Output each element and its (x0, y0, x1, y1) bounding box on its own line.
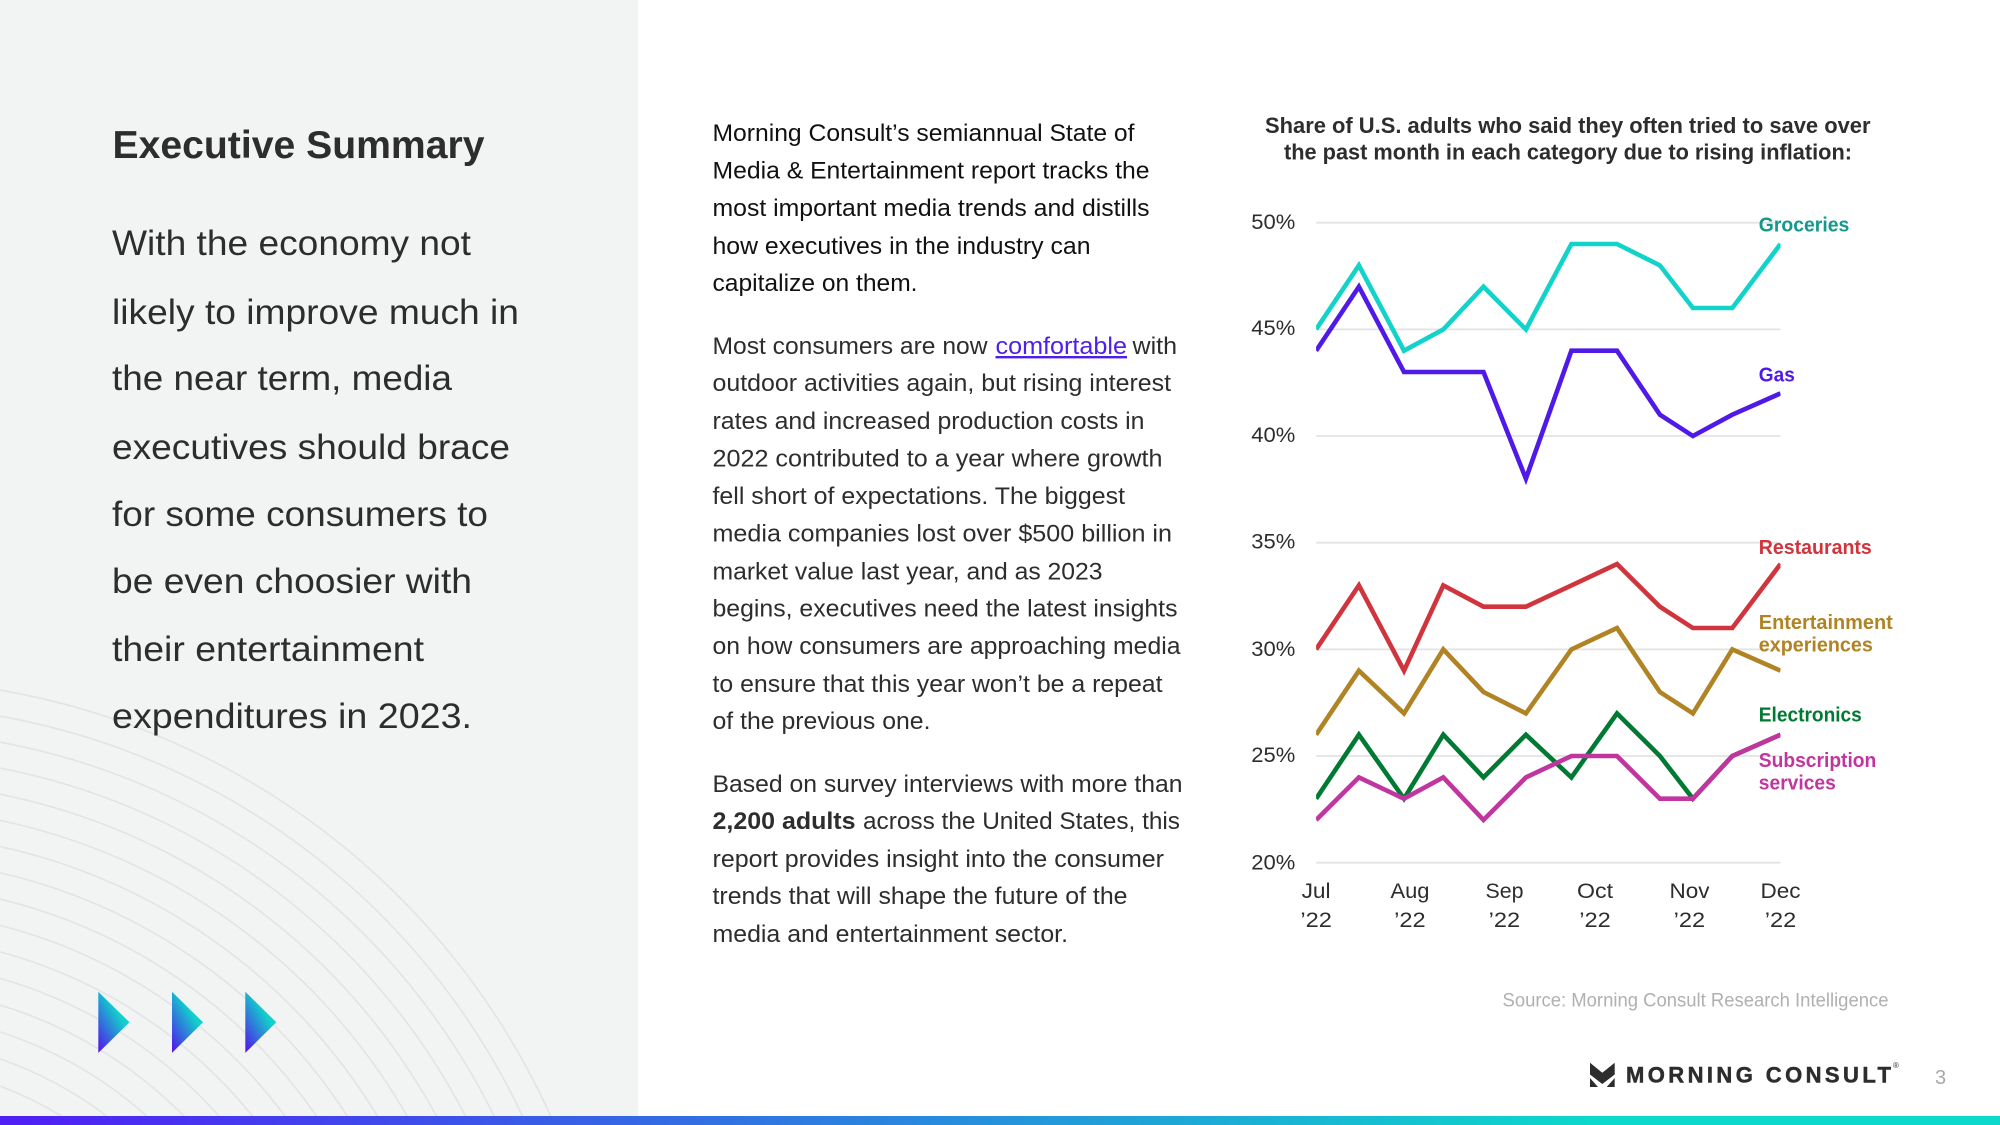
text block: intro paragraph (712, 120, 1150, 297)
series label: Gas: Gas (1759, 364, 1795, 386)
x axis labels: Nov (1670, 880, 1710, 903)
panel: executive summary sidebar (0, 0, 638, 1125)
x axis labels: ’22 (1579, 909, 1611, 932)
text block: lead statement: their entertainment (112, 630, 424, 669)
source note: Source: Morning Consult Research Intelligence (1502, 990, 1888, 1012)
data lines (1316, 244, 1780, 820)
x axis labels: ’22 (1394, 909, 1426, 932)
text block: consumer trends paragraph: Most consumers are now (712, 333, 988, 360)
y axis labels: 45% (1251, 317, 1295, 340)
x axis labels: ’22 (1674, 909, 1705, 932)
y axis labels: 40% (1251, 424, 1295, 447)
series label: Subscription services (1759, 750, 1876, 794)
x axis labels: Dec (1760, 880, 1800, 903)
series label: Entertainment experiences: Entertainment (1759, 612, 1893, 634)
text block: consumer trends paragraph: fell short of expectations. The biggest (712, 483, 1125, 510)
series label: Groceries: Groceries (1759, 214, 1849, 236)
series label: Subscription services: Subscription (1759, 750, 1876, 772)
series label: Entertainment experiences: experiences (1759, 635, 1873, 657)
text block: methodology paragraph: report provides insight into the consumer (712, 846, 1164, 873)
text block: lead statement: be even choosier with (112, 562, 472, 601)
text block: lead statement: for some consumers to (112, 495, 488, 534)
text block: intro paragraph: how executives in the industry can (712, 233, 1090, 260)
text block: methodology paragraph: trends that will shape the future of the (712, 883, 1128, 910)
text block: consumer trends paragraph: 2022 contributed to a year where growth (712, 445, 1162, 472)
x axis labels: ’22 (1300, 909, 1332, 932)
heading: Executive Summary: Executive Summary (112, 124, 485, 167)
x axis labels: ’22 (1765, 909, 1796, 932)
y axis labels: 25% (1251, 744, 1295, 767)
page number: 3 (1935, 1067, 1946, 1089)
x axis labels: Sep (1486, 880, 1524, 903)
text block: consumer trends paragraph: of the previous one. (712, 708, 930, 735)
series label: Subscription services: services (1759, 772, 1836, 794)
x axis labels: Jul (1302, 880, 1331, 903)
text block: methodology paragraph: 2,200 adults (712, 808, 856, 835)
text block: methodology paragraph: media and entertainment sector. (712, 921, 1068, 948)
text block: consumer trends paragraph: media companies lost over $500 billion in (712, 521, 1172, 548)
icon: three gradient arrows (98, 992, 276, 1053)
text block: consumer trends paragraph: with (1131, 333, 1177, 360)
text block: methodology paragraph: Based on survey interviews with more than (712, 771, 1182, 798)
text block: lead statement: expenditures in 2023. (112, 697, 472, 736)
y axis labels: 20% (1251, 852, 1295, 874)
text block: intro paragraph: capitalize on them. (712, 270, 918, 297)
x axis labels: ’22 (1489, 909, 1520, 932)
text block: consumer trends paragraph: begins, executives need the latest insights (712, 596, 1178, 623)
series label: Electronics: Electronics (1759, 705, 1862, 727)
series label: Entertainment experiences (1759, 612, 1893, 657)
logo: Morning Consult: ® (1893, 1061, 1899, 1070)
x axis labels: Aug (1390, 880, 1430, 903)
text block: consumer trends paragraph: on how consumers are approaching media (712, 633, 1181, 660)
text block: intro paragraph: Morning Consult’s semiannual State of (712, 120, 1135, 147)
series label: Restaurants: Restaurants (1759, 537, 1872, 559)
link: comfortable: comfortable (996, 333, 1127, 360)
text block: intro paragraph: most important media trends and distills (712, 195, 1150, 222)
line chart: savings attempts by category (1251, 211, 1893, 932)
y axis labels: 30% (1251, 638, 1295, 661)
icon: logo mark (1590, 1063, 1615, 1087)
text block: lead statement: With the economy not (112, 224, 471, 263)
text block: consumer trends paragraph (712, 333, 1181, 735)
text block: lead statement: likely to improve much in (112, 293, 519, 332)
chart title: Share of U.S. adults who said they often tried to save over (1265, 113, 1871, 138)
text block: consumer trends paragraph: outdoor activities again, but rising interest (712, 370, 1171, 397)
x axis labels (1300, 880, 1800, 932)
y axis labels: 50% (1251, 211, 1295, 234)
chart title: the past month in each category due to rising inflation: (1284, 140, 1852, 164)
x axis labels: Oct (1577, 880, 1613, 903)
text block: methodology paragraph (712, 771, 1182, 948)
text block: lead statement: executives should brace (112, 428, 510, 467)
text block: methodology paragraph: across the United States, this (863, 808, 1180, 835)
chart title (1265, 113, 1871, 164)
y axis labels (1251, 211, 1295, 874)
text block: consumer trends paragraph: to ensure that this year won’t be a repeat (712, 671, 1163, 698)
text block: consumer trends paragraph: rates and increased production costs in (712, 408, 1144, 435)
text block: intro paragraph: Media & Entertainment report tracks the (712, 158, 1150, 185)
bottom gradient bar (0, 1116, 2000, 1125)
text block: consumer trends paragraph: market value last year, and as 2023 (712, 558, 1102, 585)
text block: lead statement: the near term, media (112, 359, 453, 398)
text block: lead statement (112, 224, 519, 736)
y axis labels: 35% (1251, 530, 1295, 554)
logo: Morning Consult: MORNING CONSULT (1626, 1062, 1892, 1087)
